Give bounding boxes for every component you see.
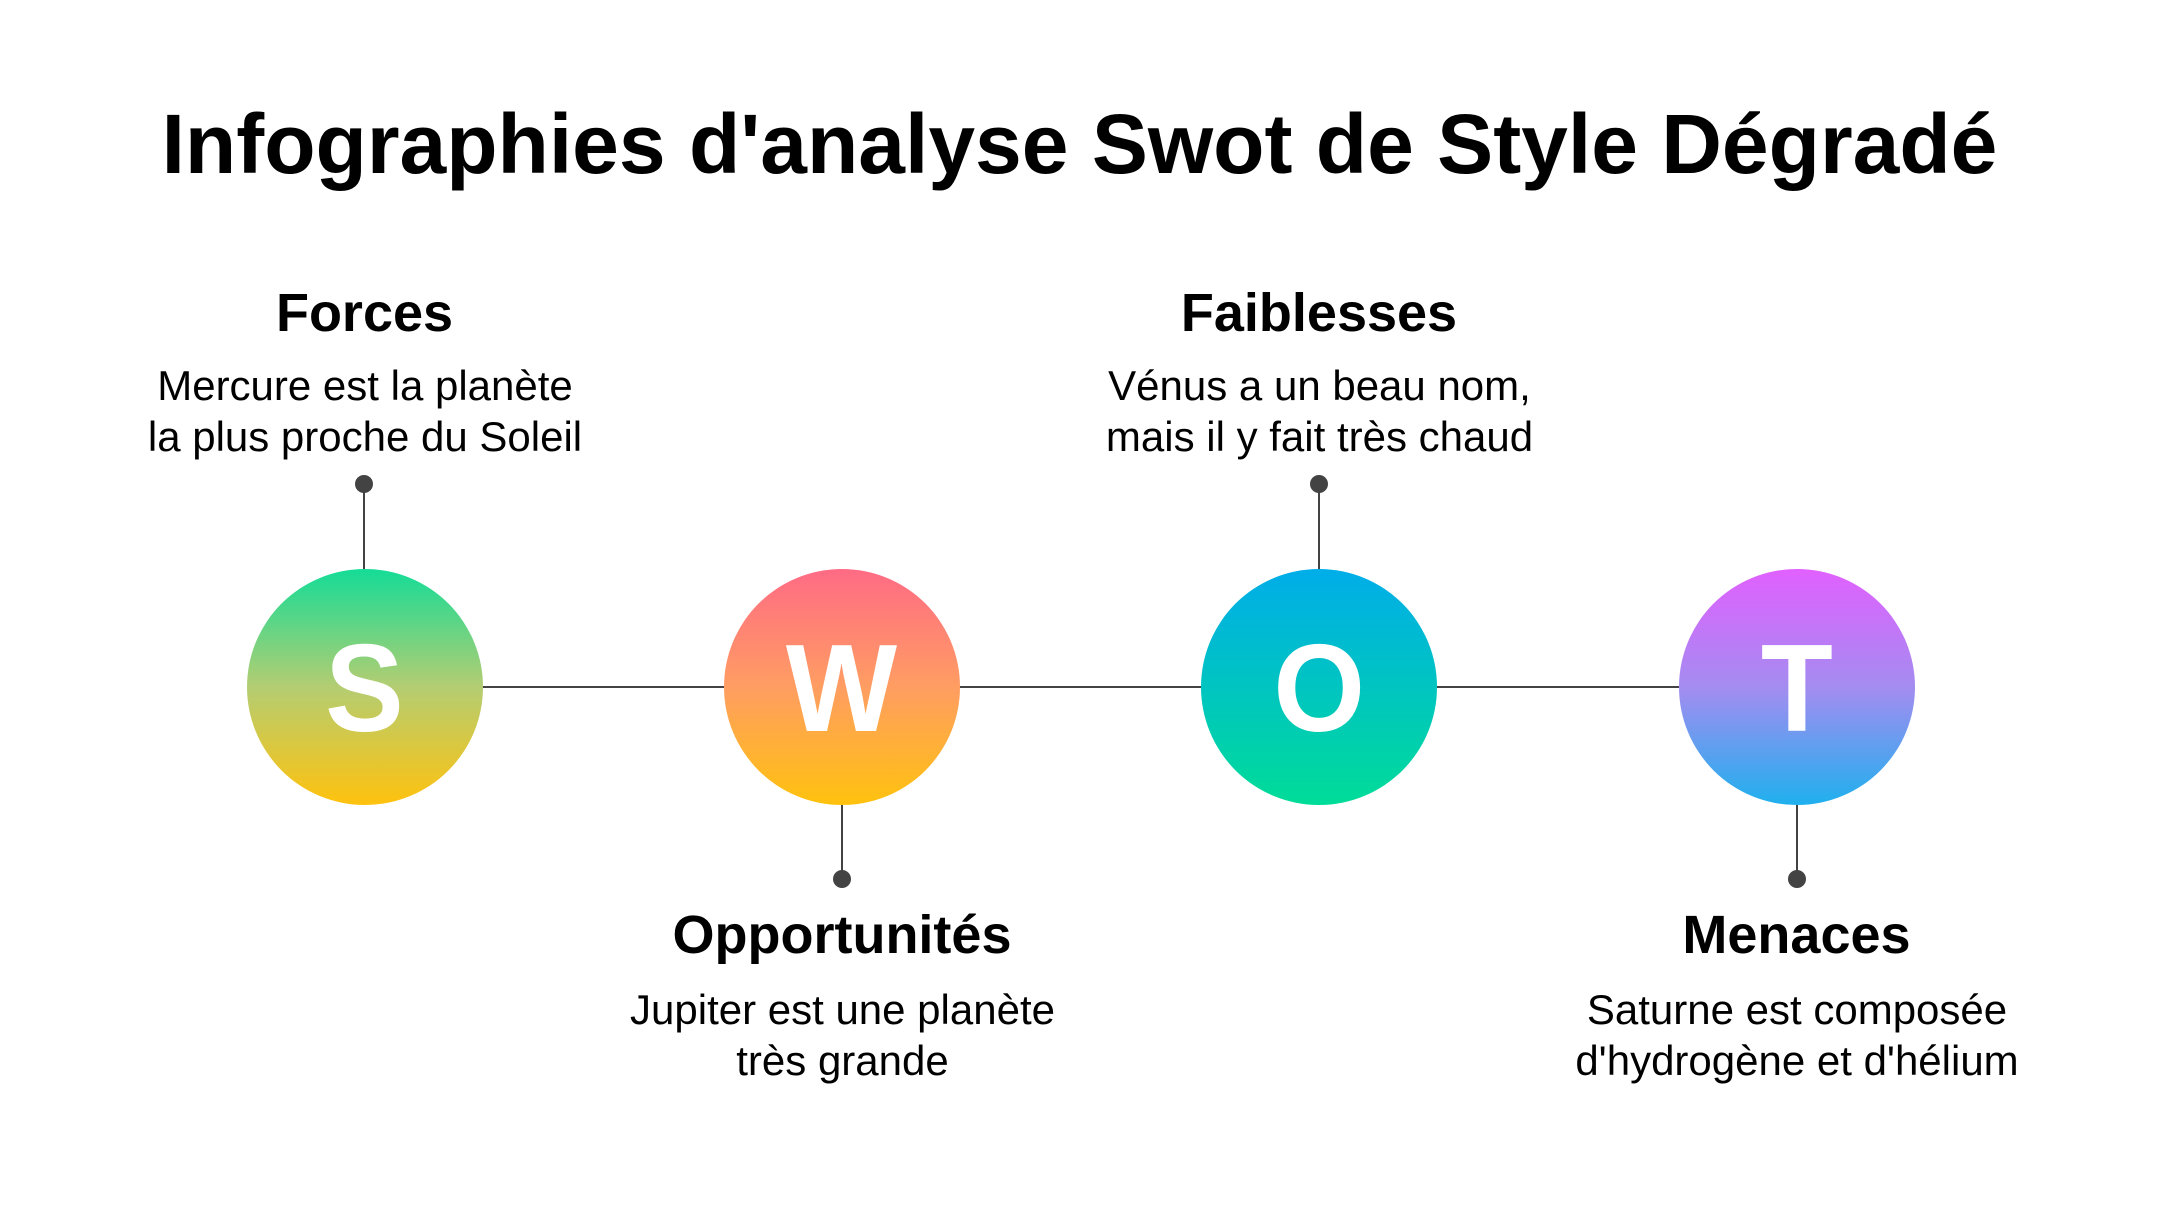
connector dot <box>1310 475 1328 493</box>
connector stem <box>1796 805 1798 879</box>
panel: Opportunités <box>630 569 1055 1084</box>
text: Forces description: la plus proche du Soleil <box>148 413 582 460</box>
text: Menaces description: d'hydrogène et d'hélium <box>1575 1037 2019 1084</box>
text: Menaces description: Saturne est composée <box>1587 986 2007 1033</box>
text: Opportunités description: Jupiter est une planète <box>630 986 1055 1033</box>
panel: Faiblesses <box>1106 283 1533 805</box>
text: Opportunités description: très grande <box>736 1037 949 1084</box>
connector stem <box>363 484 365 569</box>
circle: T: T <box>1761 620 1832 758</box>
circle: S <box>246 569 482 805</box>
text: Forces description <box>148 362 582 460</box>
circle: W <box>724 569 960 805</box>
circle: W: W <box>786 620 898 758</box>
panel: Menaces <box>1575 569 2019 1084</box>
circle: S: S <box>325 620 404 758</box>
heading: Faiblesses: Faiblesses <box>1181 283 1457 343</box>
connector dot <box>355 475 373 493</box>
title: Infographies d'analyse Swot de Style Dégradé <box>162 97 1997 191</box>
connector line: W to O <box>959 686 1203 688</box>
text: Faiblesses description: Vénus a un beau nom, <box>1108 362 1531 409</box>
connector line: O to T <box>1436 686 1680 688</box>
connector line: S to W <box>482 686 726 688</box>
circle: T <box>1678 569 1914 805</box>
heading: Forces: Forces <box>276 283 453 343</box>
connector dot <box>1788 870 1806 888</box>
panel: Forces <box>148 283 582 805</box>
text: Faiblesses description: mais il y fait très chaud <box>1106 413 1533 460</box>
text: Opportunités description <box>630 986 1055 1084</box>
connector dot <box>833 870 851 888</box>
heading: Menaces: Menaces <box>1682 905 1911 965</box>
text: Forces description: Mercure est la planète <box>157 362 573 409</box>
text: Menaces description <box>1575 986 2019 1084</box>
connector stem <box>841 805 843 879</box>
circle: O <box>1201 569 1437 805</box>
circle: O: O <box>1273 620 1365 758</box>
heading: Opportunités: Opportunités <box>672 905 1011 965</box>
text: Faiblesses description <box>1106 362 1533 460</box>
connector stem <box>1318 484 1320 569</box>
